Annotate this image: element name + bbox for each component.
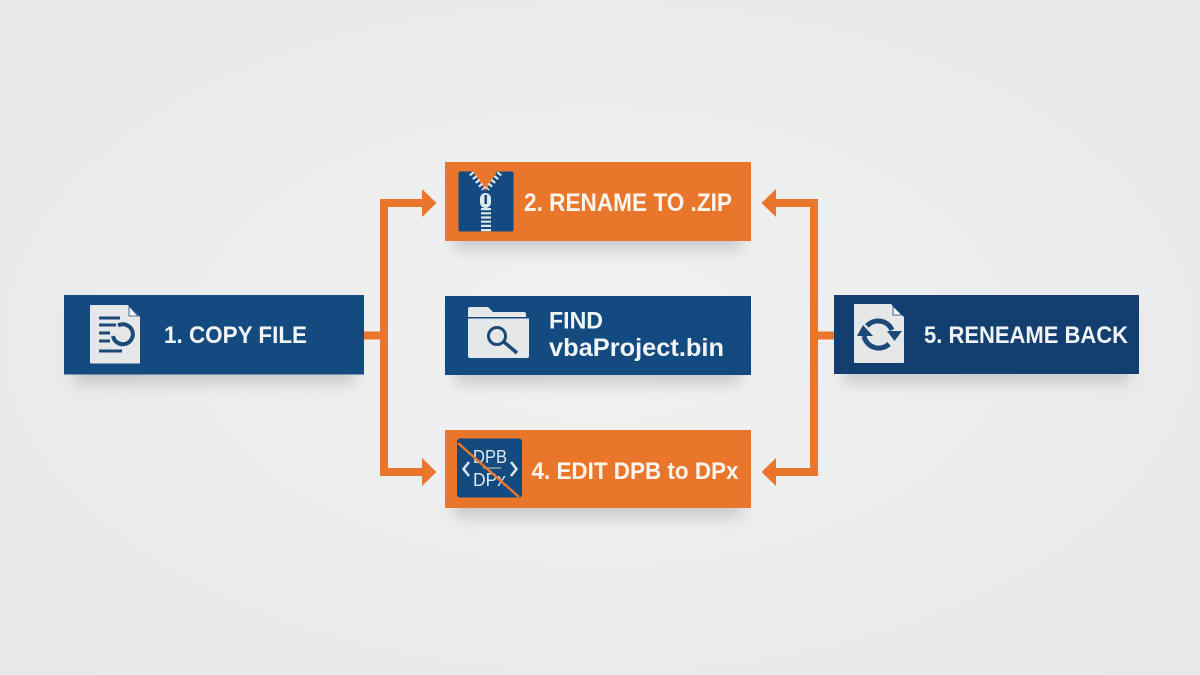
label: 5. RENEAME BACK: 5. RENEAME BACK bbox=[924, 322, 1129, 349]
arrowhead: to step 4 from right bbox=[762, 458, 776, 486]
label: FIND vbaProject.bin bbox=[549, 308, 724, 362]
panel: step 5 rename back bbox=[834, 295, 1139, 374]
icon: folder with magnifier bbox=[468, 307, 529, 358]
arrowhead: to step 2 bbox=[422, 189, 436, 217]
label: 4. EDIT DPB to DPx: 4. EDIT DPB to DPx bbox=[532, 458, 739, 485]
panel: step 1 copy file bbox=[64, 295, 364, 374]
arrows: right connector to steps 2 and 4 bbox=[762, 189, 834, 472]
shadows bbox=[74, 179, 1129, 517]
arrowhead: right refresh arrow bbox=[887, 331, 902, 341]
icon: document with refresh arrows bbox=[854, 304, 904, 363]
panel: step 4 edit DPB to DPx bbox=[445, 430, 751, 508]
label: 1. COPY FILE: 1. COPY FILE bbox=[164, 322, 307, 349]
arrowhead: left refresh arrow bbox=[857, 325, 873, 336]
icon: document with copy mark bbox=[90, 305, 140, 364]
label: FIND vbaProject.bin: FIND bbox=[549, 308, 603, 334]
icon: zipper bbox=[458, 172, 514, 232]
panel: step 2 rename to zip bbox=[445, 162, 751, 241]
icon: DPB to DPx code edit: DPx bbox=[473, 470, 506, 490]
panel: step 3 find vbaProject.bin bbox=[445, 296, 751, 375]
arrowhead: to step 2 from right bbox=[762, 189, 776, 217]
icon: DPB to DPx code edit bbox=[457, 438, 522, 498]
icon: DPB to DPx code edit: DPB bbox=[473, 447, 507, 467]
label: FIND vbaProject.bin: vbaProject.bin bbox=[549, 334, 724, 362]
arrows: left connector splitting to steps 2 and 4 bbox=[364, 189, 436, 472]
label: 2. RENAME TO .ZIP: 2. RENAME TO .ZIP bbox=[524, 189, 732, 217]
arrowhead: to step 4 bbox=[422, 458, 436, 486]
